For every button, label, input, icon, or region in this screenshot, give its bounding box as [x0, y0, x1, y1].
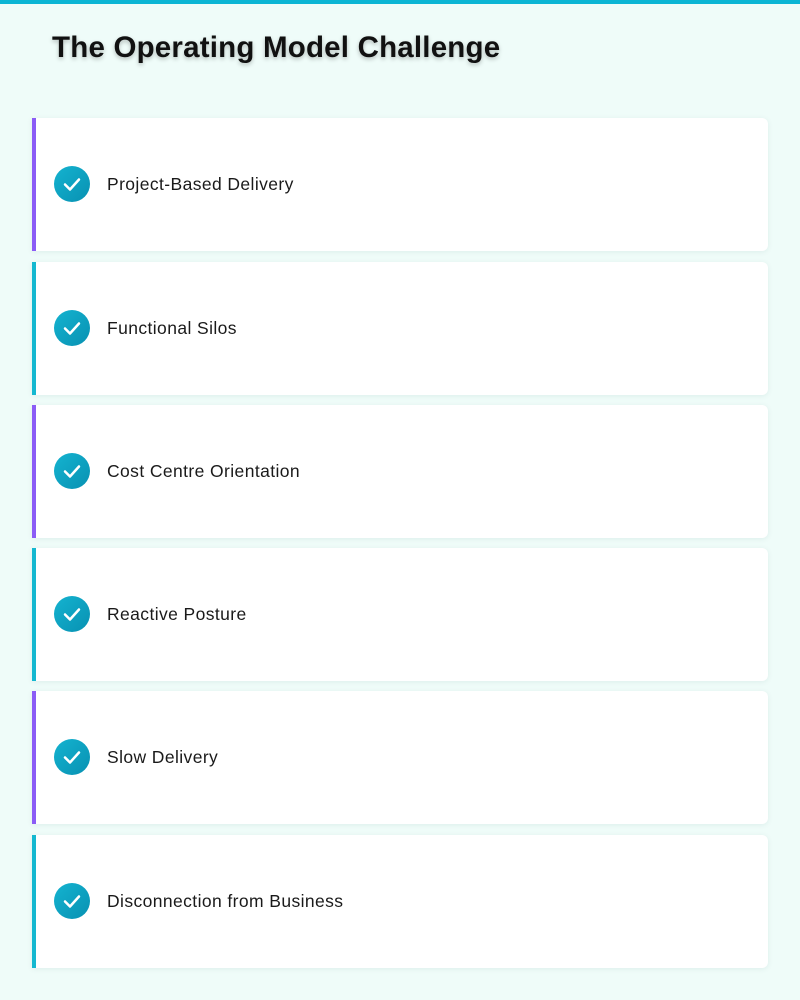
card: Functional Silos: [32, 262, 768, 395]
label: Functional Silos: [107, 318, 237, 338]
label: Project-Based Delivery: [107, 174, 294, 194]
card: Project-Based Delivery: [32, 118, 768, 251]
label: Reactive Posture: [107, 604, 247, 624]
title: The Operating Model Challenge: [52, 31, 500, 64]
icon: check: [54, 310, 90, 346]
label: Cost Centre Orientation: [107, 461, 300, 481]
card: Reactive Posture: [32, 548, 768, 681]
icon: check: [54, 453, 90, 489]
icon: check: [54, 166, 90, 202]
label: Slow Delivery: [107, 747, 218, 767]
icon: check: [54, 739, 90, 775]
icon: check: [54, 883, 90, 919]
card: Disconnection from Business: [32, 835, 768, 968]
icon: check: [54, 596, 90, 632]
card: Cost Centre Orientation: [32, 405, 768, 538]
card: Slow Delivery: [32, 691, 768, 824]
label: Disconnection from Business: [107, 891, 343, 911]
